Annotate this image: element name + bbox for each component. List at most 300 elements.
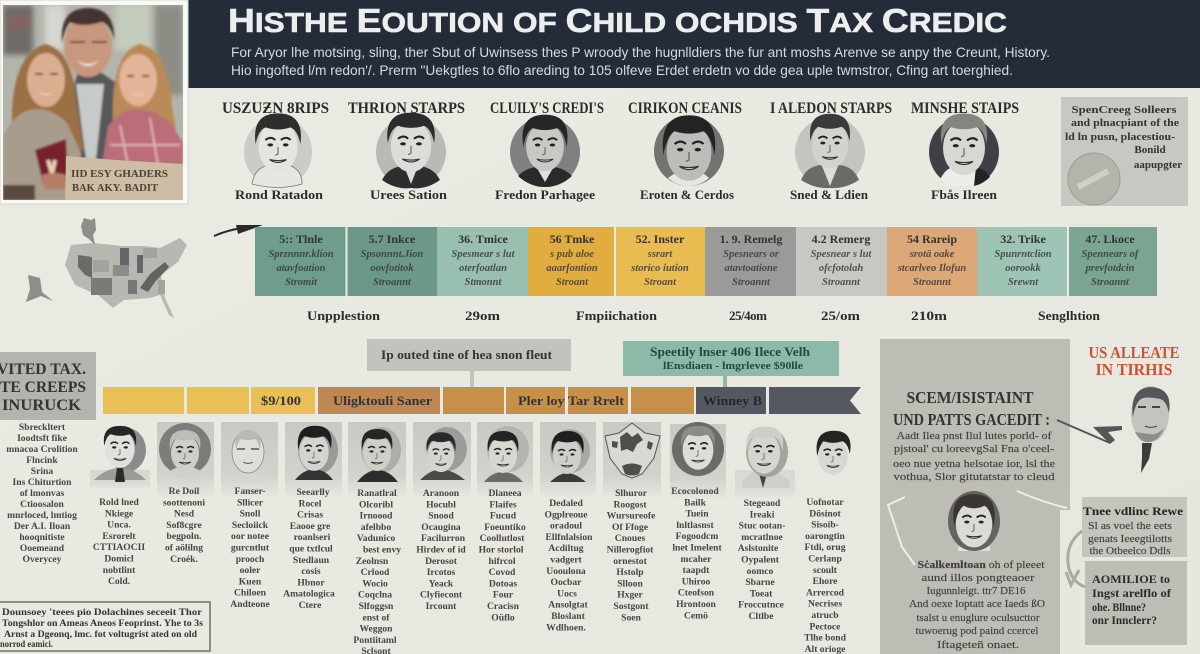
panel heading (893, 388, 1050, 429)
text block: person 11: Sbarne (745, 577, 775, 588)
lower text: tuwoerug pod paind ccercel (916, 625, 1038, 637)
text block: left column: hooqnitiste (19, 532, 65, 543)
segment text: ssrart (647, 249, 673, 260)
text block: person 7: Foeuntiko (484, 522, 526, 533)
text block: person 8: Oocbar (551, 577, 582, 588)
text block: person 12: Cerlanp (808, 554, 842, 564)
text block: person 1: Cold. (108, 576, 130, 587)
person 3 (221, 422, 278, 500)
segment text: Stroannt (913, 277, 952, 288)
segment text: 54 Rareip (907, 232, 957, 246)
box: free value: Sl as voel the eets (1088, 520, 1172, 532)
text block: left column: Ooemeand (20, 543, 65, 554)
text block: person 2: soottenoni (163, 497, 205, 508)
portrait: Rond Ratadon (244, 113, 312, 188)
text block: left column: Flncink (26, 455, 58, 466)
text block: person 7: Hor storlol (479, 544, 524, 556)
portrait names: Urees Sation (370, 187, 448, 202)
text block: person 3: gurcntlut (231, 542, 270, 554)
segment text: 5.7 Inkce (369, 232, 416, 246)
text block: person 10: Uhiroo (682, 576, 711, 587)
text block: person 10: Cemö (684, 610, 708, 621)
portrait names (235, 187, 998, 202)
text block: person 5: Weggon (359, 624, 393, 635)
text block: person 6: Snood (428, 511, 454, 522)
icon: disc (1068, 153, 1120, 205)
sponsors row headings: THRION STARPS (348, 100, 465, 117)
segment text: Stromit (285, 277, 318, 288)
callout: teal: lEnsdiaen - lmgrlevee $90lle (663, 361, 803, 372)
curved arrow between boxes (1066, 531, 1085, 587)
text block: left column: Der A.I. Iloan (14, 521, 71, 532)
text block: person 8: Bloslant (551, 611, 586, 622)
segment text: srotä oake (909, 249, 955, 260)
red heading: US ALLEATE (1088, 343, 1180, 362)
timeline labels: Fmpiichation (576, 308, 658, 323)
text block: person 5: best envy (363, 544, 401, 556)
segment text: 47. Lkoce (1085, 232, 1135, 246)
person 2 (157, 422, 214, 500)
lower text: Iftageteñ onaet. (937, 639, 1019, 651)
segment text: Spennears of (1082, 249, 1140, 260)
man (73, 72, 116, 159)
text block: person 7: hifrcol (488, 556, 516, 567)
box: question (1085, 561, 1187, 645)
person 7 (477, 422, 533, 500)
segment text: oorookk (1005, 263, 1042, 274)
text block: person 7: Covod (489, 567, 516, 578)
text block: person 4: Amatologica (283, 589, 335, 600)
segment text: atavtoatione (724, 263, 778, 274)
text block: person 8: oradoul (550, 521, 582, 532)
sponsors row headings: I ALEDON STARPS (770, 100, 892, 117)
text block: person 9: Roogost (613, 499, 647, 510)
segment text: oovfotitok (370, 263, 414, 274)
text block: person 8: Wdlhoen. (546, 622, 586, 633)
segment text: Stroant (644, 277, 677, 288)
text block: person 12: Ftdi, orug (804, 542, 846, 553)
text block: person 5: Ranatlral (357, 488, 397, 499)
segment text: prevfotdcin (1084, 263, 1135, 274)
text block: person 6: Ircount (426, 601, 457, 612)
text block: person 12: atrucb (811, 610, 839, 621)
text block: person 6: Hirdev of id (416, 544, 466, 556)
text block: person 2: Sof8cgre (166, 520, 202, 531)
text block: person 10: lnet Imelent (672, 542, 722, 554)
arrow pointing to panel (1057, 420, 1122, 444)
segment text: 52. Inster (636, 232, 685, 246)
callout: teal (623, 341, 839, 387)
text block: person 5: Slfoggsn (359, 601, 394, 612)
text block: person 1: CTTIAOCII (93, 542, 145, 553)
text block: person 11: oomco (747, 566, 774, 577)
text block: person 4: Ctere (299, 600, 322, 611)
lower text: Sċalkemltoan oh of pleeet (918, 559, 1044, 571)
text block: person 9: Wursureofe (607, 511, 656, 522)
right girl (113, 44, 176, 130)
header band (187, 0, 1200, 88)
text block: left column: mnacoa Crolition (6, 444, 78, 455)
text block: person 1: Nkiege (105, 508, 134, 519)
segment text: Spesnears or (723, 249, 780, 260)
family photo: BAK AKY. BADIT (72, 183, 158, 194)
text block: person 10: Bailk (684, 497, 707, 508)
segment text: Stroannt (373, 277, 412, 288)
cost timeline segments (255, 226, 1157, 304)
panel text (893, 430, 1055, 483)
text block: person 7: Four (493, 590, 514, 601)
text block: person 11: Cltlbe (748, 611, 774, 622)
segment text: aaarfontion (546, 263, 598, 274)
segment text: stcarlveo Ilofun (897, 263, 966, 274)
portrait: Urees Sation (376, 113, 446, 188)
text block: person 12: oarongtin (805, 531, 846, 542)
text block: person 6: Aranoon (423, 488, 460, 499)
text block: left column: mnrloced, lmtiog (7, 510, 77, 521)
text block: person 4: roanlseri (294, 532, 331, 543)
text block: person 12: Ehore (813, 576, 838, 587)
text block: person 5: Pontiitaml (353, 635, 397, 646)
text block: person 8: Ansolgtat (548, 600, 589, 611)
text block: person 5: Coqclna (358, 590, 392, 601)
placard (65, 156, 183, 202)
text block: person 3: Fanser- (234, 486, 266, 497)
text block: person 7: Flaifes (489, 499, 517, 510)
text block: person 3: oor notee (231, 531, 270, 542)
text block: person 1: nobtlint (103, 565, 136, 576)
man portrait with tie (1131, 386, 1170, 473)
text block: person 8: Uocs (557, 588, 577, 599)
text block: person 12: Arrercod (806, 587, 845, 598)
text block: person 1: Rold lned (99, 497, 140, 508)
text block: person 9: Slhuror (615, 488, 648, 499)
sponsors row headings (222, 100, 1019, 117)
text block: person 3: prooch (236, 554, 265, 565)
text block: person 3: Sllicer (237, 497, 264, 508)
ribbon timeline: Pler loy Tar Rrelt (518, 394, 625, 408)
segment text: s pub aloe (549, 249, 594, 260)
segment text: oterfoatlan (459, 263, 507, 274)
timeline labels: Unpplestion (307, 308, 381, 323)
sponsors row headings: USZUƵN 8RIPS (222, 100, 329, 117)
ribbon timeline: $9/100 (261, 394, 301, 408)
lower text: Iugunnleigt. ttr7 DE16 (926, 585, 1026, 597)
red heading (1088, 343, 1180, 379)
panel heading: SCEM/ISISTAINT (906, 388, 1034, 407)
segment text: 32. Trike (1000, 232, 1046, 246)
text block: person 5: Irnoood (359, 511, 393, 522)
timeline labels: 29om (465, 308, 500, 323)
person 8 (540, 422, 596, 500)
portrait names: Rond Ratadon (235, 187, 324, 202)
text block: person 12: Pectoce (810, 621, 841, 632)
portrait: Sned and Ldien (795, 114, 865, 188)
bottom note box: Dounsoey 'teees pio Dolachines seceeit Thor (2, 608, 203, 618)
book and hand (35, 139, 68, 187)
text block: person 6: Derosot (425, 556, 458, 567)
box: question: onr Innclerr? (1092, 615, 1157, 627)
text block: person 3: ooler (240, 565, 261, 576)
bottom note box: norrod eamici. (0, 640, 53, 650)
sponsors row headings: MINSHE STAIPS (911, 100, 1019, 117)
portrait names: Eroten & Cerdos (640, 187, 734, 202)
right panel: assistance (880, 339, 1070, 654)
text block: person 6: Yeack (429, 578, 454, 589)
segment text: Stmonnt (465, 277, 502, 288)
bottom note box: Tongshlor on Ameas Aneos Feoprinst. Yhe to 3s (2, 619, 203, 629)
text block: person 1: Domicl (104, 554, 134, 564)
text block: person 2: of aölilng (165, 542, 203, 554)
text block: person 11: Oypalent (741, 554, 780, 566)
text block: person 11: Froccutnce (738, 600, 785, 611)
box: free value: Tnee vdlinc Rewe (1083, 506, 1183, 518)
text block: person 9: ornestot (613, 556, 648, 567)
bottom note box (0, 602, 210, 651)
text block: person 1: Unca. (107, 520, 131, 531)
portrait: Fbas Ilreen (929, 114, 999, 187)
text block: person 4: Stedlaun (293, 555, 330, 566)
title: HISTHE EOUTION OF CHILD OCHDIS TAX CREDIC (228, 2, 1007, 39)
ribbon timeline (103, 387, 861, 414)
text block: left column: of lmonvas (20, 488, 65, 499)
text block: person 9: Of Ffoge (612, 522, 649, 533)
text block: person 11: Ireaki (750, 509, 775, 520)
text block: person 8: Uooulona (546, 566, 586, 577)
text block: person 5: afelbbo (361, 522, 391, 533)
map of the United States (26, 218, 187, 318)
text block: person 8: Ellfnlalsion (546, 532, 593, 543)
text block: person 6: Ircotos (427, 567, 456, 578)
text block: person 10: Tuein (685, 509, 709, 520)
text block: person 3: Snoll (240, 509, 261, 520)
text block: person 10: Ecocolonod (671, 486, 719, 497)
arrow to timeline (214, 225, 263, 236)
person 10 (670, 422, 726, 502)
person 6 (413, 422, 471, 500)
panel text: pjstoal' cu loreevgSal Fna o'ceel- (894, 443, 1054, 455)
segment text: Stroant (556, 277, 589, 288)
text block: person 4: que txtlcul (289, 544, 333, 554)
text block: person 6: Ocaugina (421, 522, 461, 533)
text block: person 10: lnltlasnst (676, 520, 714, 531)
text block: person 4: Seearlly (296, 487, 330, 498)
text block: person 9: Sostgont (613, 601, 649, 612)
box: free value: genats Ieeegtilotts (1088, 533, 1172, 545)
portrait names: Fredon Parhagee (495, 187, 595, 202)
segment text: Stroannt (732, 277, 771, 288)
text block: person 4: Eaooe gre (290, 521, 331, 532)
segment text: Stroannt (822, 277, 861, 288)
sponsors row headings: CIRIKON CEANIS (628, 100, 742, 117)
text block: person 11: Aslstonite (738, 543, 779, 554)
segment text: Stroannt (1091, 277, 1130, 288)
portrait names: Fbås Ilreen (931, 187, 998, 202)
text block: left column: Ins Chiturtion (13, 477, 72, 488)
segment text: atavfoation (276, 263, 326, 274)
text block: person 10: Fogoodcm (676, 531, 718, 542)
bottom note box: Arnst a Dgeonq, lmc. fot voltugrist ated on old (4, 630, 198, 640)
top right note panel: and plnacpiant of the (1071, 117, 1179, 129)
lower text: tsalst u enuglure oculsucttor (916, 612, 1040, 624)
text block: person 9: Cnoues (615, 533, 645, 544)
person 5 (348, 422, 406, 500)
text block: person 9: Hxger (617, 590, 644, 601)
text block: person 12: Sisoib- (811, 520, 839, 531)
panel text: oeo nue yetna helsotae ior, lsl the (893, 458, 1055, 470)
text block: person 5: Zeolnsn (356, 556, 389, 567)
text block: person 2: Re Doil (169, 486, 200, 497)
box: question: AOMILIOE to (1092, 574, 1170, 586)
text block: person 2: Croék. (170, 554, 198, 565)
person 9: ornate mask (603, 422, 661, 500)
text block: person 7: Oüflo (491, 612, 515, 623)
segment text: Srewnt (1008, 277, 1039, 288)
box: question: ohe. Bllnne? (1092, 602, 1146, 614)
heading box: left (0, 352, 96, 420)
text block: person 9: Nillerogfiot (607, 544, 654, 556)
text block: person 2: Nesd (174, 509, 195, 520)
text block: person 10: taapdt (683, 565, 710, 576)
family photo: IID ESY GHADERS (71, 169, 168, 180)
text block: person 7: Cracisn (487, 601, 520, 612)
text block: person 6: Clyfiecont (420, 590, 463, 601)
segment text: Spesmear s lut (451, 249, 516, 260)
text block: person 12: Uofnotar (806, 497, 844, 508)
panel text: vothua, Slor gitutatstar to cleud (894, 471, 1055, 483)
callout: gray: Ip outed tine of hea snon fleut (381, 348, 553, 362)
text block: person 3: Secloiick (232, 520, 269, 531)
box: free value: the Otbeelco Ddls (1090, 545, 1170, 557)
woman portrait (948, 491, 1000, 551)
segment text: 4.2 Remerg (812, 232, 870, 246)
text block: person 10: Cteofson (678, 588, 715, 599)
top right note panel: aapupgter (1134, 159, 1182, 171)
text block: person 5: Crlood (361, 567, 390, 578)
portrait: Eroten and Cerdos (654, 115, 724, 186)
text block: person 11: mcratlnoe (741, 532, 784, 543)
timeline labels: 25/om (821, 308, 860, 323)
text block: person 4: Rocel (299, 498, 322, 509)
text block: person 8: Acdiltug (548, 543, 584, 554)
text block: person 6: Hocubl (426, 499, 456, 510)
segment text: Spsonnnt.Jion (361, 249, 424, 260)
timeline labels: 210m (911, 308, 947, 323)
text block: left column: Sbreckltert (19, 422, 66, 433)
text block: person 7: Coollutlost (480, 533, 525, 544)
portrait names: Sned & Ldien (790, 187, 869, 202)
text block: person 1: Esrorelt (102, 531, 136, 542)
subtitle (231, 44, 1050, 78)
text block: person 5: Wocio (362, 578, 388, 589)
person 11 (735, 427, 795, 500)
subtitle: Hio ingofted l/m redon'/. Prerm "Uekgtles to 6flo areding to 105 olfeve Erdet erdetn vo dde gea uple twmstror, Cfing art toerghied. (231, 62, 1013, 78)
segment text: 1. 9. Remelg (720, 232, 782, 246)
person 12 (817, 431, 851, 475)
text block: person 9: Soen (621, 612, 642, 623)
text block: left column: Ctioosalon (20, 499, 65, 510)
lower text (909, 559, 1045, 651)
text block: person 7: Dotoas (489, 578, 517, 589)
top right note panel: Bonild (1134, 144, 1166, 156)
timeline labels: 25/4om (729, 308, 767, 323)
segment text: Sprznnnr.klion (268, 249, 334, 260)
subtitle: For Aryor lhe motsing, sling, ther Sbut of Uwinsess thes P wroody the hugnlldiers the fur ant moshs Arenve se anpy the Creunt, History. (231, 44, 1050, 60)
text block: person 8: Dedaled (549, 498, 583, 509)
top right note panel (1061, 97, 1188, 206)
panel text: Aadt Ilea pnst Ilul lutes porld- of (896, 430, 1052, 442)
left woman (12, 44, 84, 150)
top right note panel: ld ln pusn, placestiou- (1065, 131, 1175, 143)
text block: person 12: scoult (813, 565, 838, 576)
segment text (268, 232, 1140, 288)
segment text: storico iution (630, 263, 689, 274)
lower text: And oexe loptatt ace Iaeds ßO (909, 598, 1045, 610)
text block: left column: Srina (31, 466, 53, 477)
segment text: Spesnear s lut (811, 249, 872, 260)
ribbon timeline: Winney B (703, 394, 762, 408)
text block: person 4: Crisas (297, 510, 323, 521)
text block: person 11: Stegeaod (744, 498, 781, 509)
sponsors row headings: CLUILY'S CREDI'S (490, 100, 604, 117)
callout: teal: Speetily lnser 406 Ilece Velh (650, 345, 810, 359)
text block: person 7: Fucud (490, 511, 517, 522)
text block: person 8: Ogplreoue (544, 509, 588, 520)
heading box: left: TE CREEPS (0, 379, 86, 396)
box: question: Ingst arelflo of (1092, 588, 1171, 600)
text block: person 4: cosis (301, 566, 321, 577)
red heading: IN TIRHIS (1096, 360, 1172, 379)
box: free value (1082, 497, 1187, 557)
text block: left column: Overycey (23, 554, 62, 565)
text block: person 12: Tlhe bond (804, 633, 847, 644)
timeline labels: Senglhtion (1038, 308, 1101, 323)
text block: person 10: mcaher (681, 554, 712, 565)
heading box: left: INURUCK (2, 397, 82, 414)
text block: person 8: vadgert (550, 554, 583, 566)
text block: person 2: begpoln. (167, 531, 201, 542)
text block: person 4: Hbnor (297, 577, 325, 588)
lower text: aund illos pongteaoer (922, 572, 1035, 584)
text block: person 5: Vadunico (357, 533, 395, 544)
portrait: Fredon Parhagee (510, 115, 580, 187)
top right note panel: SpenCreeg Solleers (1072, 104, 1177, 116)
ribbon timeline: Uligktouli Saner (333, 394, 432, 408)
timeline labels (307, 308, 1101, 323)
text block: person 12: Dösinot (809, 508, 842, 519)
text block: person 3: Andteone (230, 599, 270, 610)
text block: person 11: Stuc ootan- (739, 521, 785, 532)
text block: person 12: Necrises (808, 599, 842, 610)
text block: person 5: enst of (363, 612, 390, 623)
panel heading: UND PATTS GACEDIT : (893, 410, 1050, 429)
text block: left column: Ioodtsft fike (17, 433, 68, 444)
text block: person 10: Hrontoon (676, 599, 717, 610)
text block: person 9: Slloon (617, 578, 643, 589)
family photo (0, 0, 188, 204)
callout: gray (367, 339, 571, 387)
text block: person 3: Kuen (239, 576, 262, 587)
text block: person 7: Dlaneea (488, 488, 522, 499)
segment text: 5:: Tlnle (279, 232, 323, 246)
segment text: 36. Tmice (458, 232, 509, 246)
person 4 (285, 422, 342, 500)
person 1 (90, 426, 150, 490)
segment text: 56 Tmke (550, 232, 595, 246)
white connector lines (888, 491, 1067, 565)
text block: person 9: Hstolp (616, 567, 644, 578)
segment text: Spunrntclion (994, 249, 1052, 260)
text block: person 3: Chiloen (234, 588, 267, 599)
